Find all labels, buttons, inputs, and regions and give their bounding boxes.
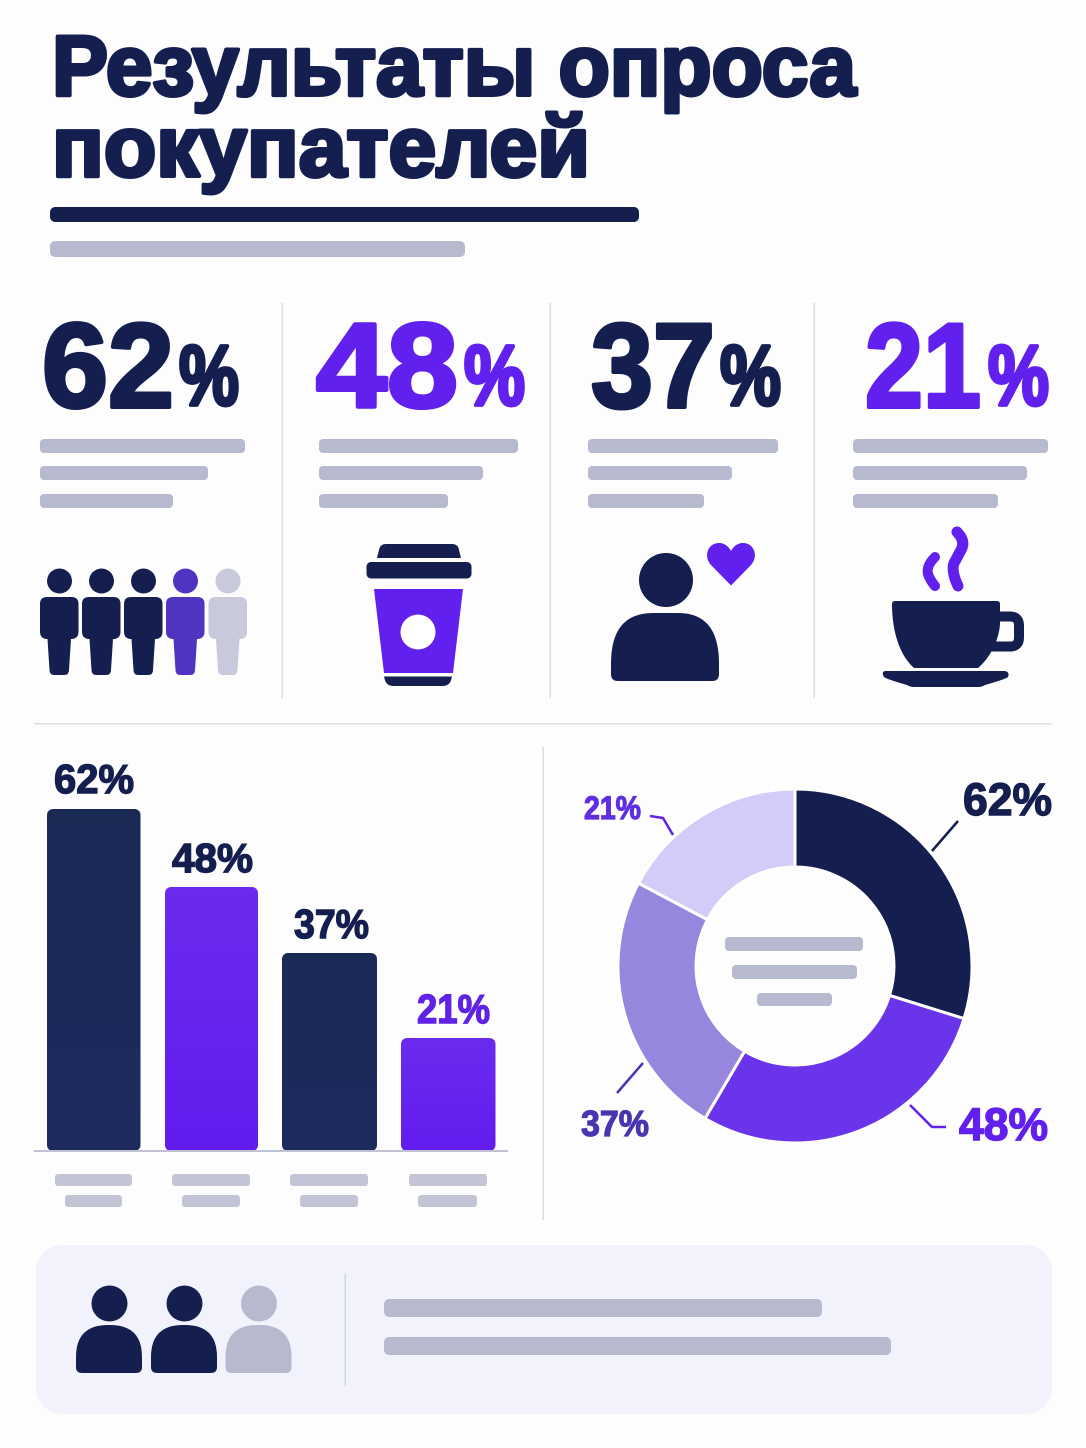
stat number 37%: % (720, 329, 781, 424)
donut center placeholder (725, 937, 863, 1006)
donut segment 37% (618, 883, 745, 1118)
subtitle placeholder (50, 241, 465, 257)
stat number 37%: 37 (591, 299, 715, 433)
stat number 62%: % (179, 329, 239, 424)
description placeholder lines (40, 439, 245, 508)
bar value labels: 62% (54, 756, 134, 802)
bar value labels: 21% (417, 986, 490, 1032)
stat number 48% (316, 299, 525, 433)
donut segment 62% (795, 789, 972, 1019)
donut labels: 37% (581, 1103, 649, 1144)
donut labels: 62% (963, 774, 1052, 825)
donut chart (581, 774, 1052, 1150)
description placeholder lines (588, 439, 778, 508)
stat number 48%: % (464, 329, 525, 424)
panel: stat 48% (316, 299, 525, 686)
panel: stat 37% (588, 299, 781, 681)
description placeholder lines (319, 439, 518, 508)
panel: stat 62% (40, 299, 247, 675)
panel: summary footer (36, 1245, 1052, 1414)
description placeholder lines (853, 439, 1048, 508)
bar 48% (165, 887, 258, 1151)
icon: person with heart (611, 543, 755, 681)
bar 62% (47, 809, 140, 1151)
bar value labels (54, 756, 490, 1032)
icon: hot coffee cup on saucer (883, 532, 1019, 687)
donut labels: 21% (584, 790, 641, 826)
title: Результаты опроса (52, 19, 857, 114)
donut leader lines (617, 816, 958, 1127)
icon: three users (76, 1286, 292, 1373)
donut labels (581, 774, 1052, 1150)
donut segment 48% (705, 995, 964, 1143)
stat number 48%: 48 (316, 299, 458, 433)
icon: five people (40, 568, 247, 675)
panel: stat 21% (853, 299, 1049, 687)
donut labels: 48% (959, 1099, 1048, 1150)
bar value labels: 48% (172, 835, 253, 881)
title (52, 19, 857, 195)
stat number 62% (42, 299, 239, 433)
footer background (36, 1245, 1052, 1414)
stat number 21%: 21 (865, 299, 981, 433)
bar 37% (282, 953, 377, 1151)
footer text placeholder lines (384, 1299, 891, 1355)
donut segment 21% (638, 789, 795, 920)
icon: takeaway coffee cup (366, 544, 472, 686)
stat number 62%: 62 (42, 299, 174, 433)
stat number 21%: % (988, 329, 1049, 424)
chart baseline (34, 1150, 508, 1152)
title: покупателей (52, 100, 590, 195)
title underline (50, 207, 639, 222)
bar chart (34, 756, 508, 1207)
bar category placeholders (55, 1174, 487, 1207)
bar value labels: 37% (294, 901, 369, 947)
bar 21% (401, 1038, 496, 1151)
